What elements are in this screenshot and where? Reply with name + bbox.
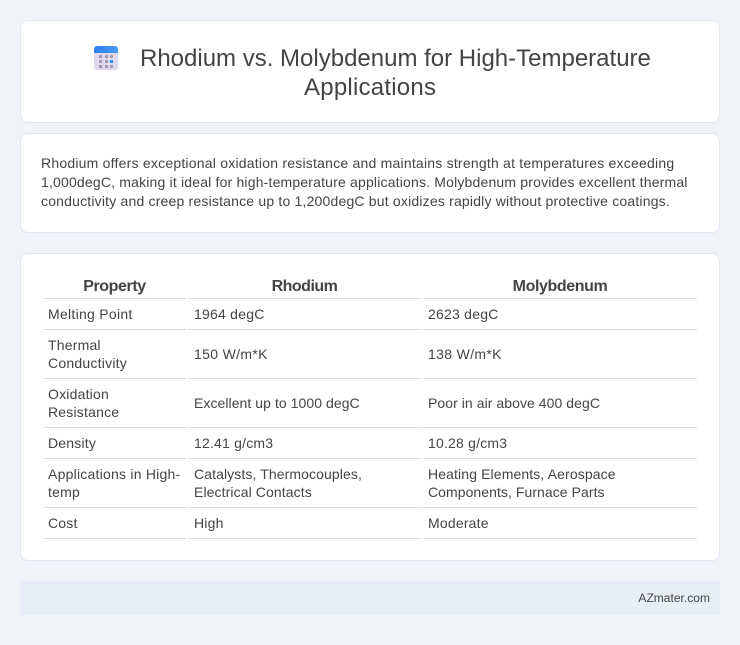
- table: Applications in High-: [48, 466, 180, 482]
- table: Poor in air above 400 degC: [428, 395, 600, 411]
- summary text: 1,000degC, making it ideal for high-temperature applications. Molybdenum provides excellent thermal: [41, 174, 688, 190]
- summary card: [20, 133, 720, 233]
- header: rhodium: Rhodium: [272, 278, 337, 295]
- table: Thermal: [48, 337, 101, 353]
- table: Melting Point: [48, 306, 133, 322]
- table: Heating Elements, Aerospace: [428, 466, 616, 482]
- header: molybdenum: Molybdenum: [513, 278, 607, 295]
- table: High: [194, 515, 224, 531]
- table: 1964 degC: [194, 306, 265, 322]
- title: Rhodium vs. Molybdenum for High-Temperature: [140, 45, 651, 72]
- table: Components, Furnace Parts: [428, 484, 605, 500]
- table: Density: [48, 435, 96, 451]
- summary text: conductivity and creep resistance up to 1,200degC but oxidizes rapidly without protective coatings.: [41, 193, 670, 209]
- table: temp: [48, 484, 80, 500]
- icon: calendar: [94, 46, 118, 70]
- footer bar: [20, 581, 720, 615]
- table: Excellent up to 1000 degC: [194, 395, 360, 411]
- table: Cost: [48, 515, 78, 531]
- table: 2623 degC: [428, 306, 499, 322]
- title card: [20, 20, 720, 123]
- table: Oxidation: [48, 386, 109, 402]
- header: property: Property: [83, 278, 146, 295]
- table: Catalysts, Thermocouples,: [194, 466, 362, 482]
- table: Electrical Contacts: [194, 484, 312, 500]
- comparison table card: [20, 253, 720, 561]
- table: 10.28 g/cm3: [428, 435, 507, 451]
- table: Moderate: [428, 515, 489, 531]
- table: Resistance: [48, 404, 119, 420]
- table: 138 W/m*K: [428, 346, 502, 362]
- table: Conductivity: [48, 355, 127, 371]
- summary text: Rhodium offers exceptional oxidation resistance and maintains strength at temperatures exceeding: [41, 155, 674, 171]
- summary text: [41, 155, 688, 209]
- title: Applications: [304, 74, 436, 101]
- table: 12.41 g/cm3: [194, 435, 273, 451]
- title: [140, 45, 651, 101]
- table: 150 W/m*K: [194, 346, 268, 362]
- footer credit: AZmater.com: [638, 591, 710, 605]
